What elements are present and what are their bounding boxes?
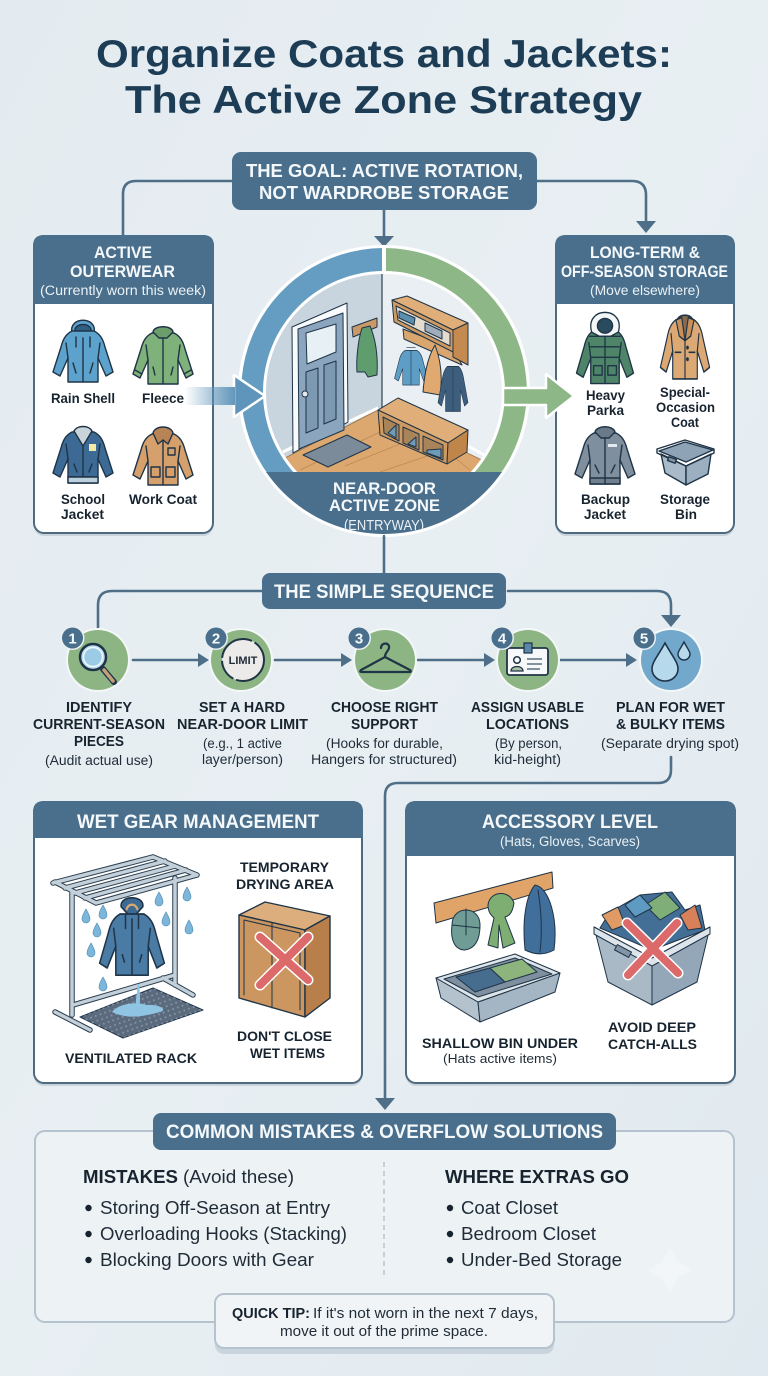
icon: school jacket xyxy=(53,426,113,483)
icon: hanger xyxy=(360,644,411,672)
label: school jacket: Jacket xyxy=(61,506,104,522)
connector: sequence to lower panels xyxy=(375,757,671,1110)
panel: wet gear management xyxy=(33,801,363,1086)
number badge: 2 xyxy=(212,630,220,648)
step text: (Separate drying spot) xyxy=(601,736,739,751)
step text xyxy=(311,699,457,767)
step text: (e.g., 1 active xyxy=(203,736,282,751)
step text: SUPPORT xyxy=(351,716,418,733)
label: special-occasion coat xyxy=(656,384,715,430)
floor xyxy=(286,410,481,472)
heading: active outerwear: ACTIVE xyxy=(94,244,152,262)
step text xyxy=(177,699,308,767)
label: school jacket: School xyxy=(61,491,105,507)
ring: green half xyxy=(386,248,527,491)
step text xyxy=(601,699,739,751)
callout: quick tip xyxy=(215,1294,554,1354)
icon: limit sign: LIMIT xyxy=(229,655,258,667)
icon: special-occasion coat xyxy=(660,315,710,379)
active zone circle xyxy=(238,245,530,542)
step text: CHOOSE RIGHT xyxy=(331,699,438,716)
drainage mat xyxy=(80,984,203,1038)
label: heavy parka xyxy=(586,387,625,418)
label: avoid deep catch-alls: CATCH-ALLS xyxy=(608,1036,697,1052)
label: shallow bin under: SHALLOW BIN UNDER xyxy=(422,1035,578,1051)
label: don't close wet items: DON'T CLOSE xyxy=(237,1028,332,1044)
icon: magnifier xyxy=(80,644,114,682)
label: heavy parka: Parka xyxy=(587,402,624,418)
label: storage bin xyxy=(660,491,710,522)
list: mistakes: Overloading Hooks (Stacking) xyxy=(100,1223,347,1244)
goal banner: THE GOAL: ACTIVE ROTATION, xyxy=(246,160,523,181)
bench xyxy=(378,398,468,464)
list: where extras go: Under-Bed Storage xyxy=(461,1249,622,1270)
number badge: 1 xyxy=(68,630,77,648)
label: shallow bin under: (Hats active items) xyxy=(443,1051,557,1066)
step text xyxy=(33,699,165,768)
label: fleece: Fleece xyxy=(142,390,184,406)
heading: long-term storage xyxy=(561,244,728,298)
panel: long-term storage xyxy=(555,235,735,536)
number badge: 3 xyxy=(355,630,363,648)
label: don't close wet items xyxy=(237,1028,332,1061)
water drops xyxy=(82,887,193,991)
heading: active outerwear: (Currently worn this week) xyxy=(40,283,206,298)
step text: PLAN FOR WET xyxy=(616,699,725,716)
icon: deep bin with red cross xyxy=(594,892,710,1005)
connector: sequence left branch xyxy=(98,591,268,628)
list: mistakes: Storing Off-Season at Entry xyxy=(100,1197,331,1218)
label: backup jacket: Jacket xyxy=(584,506,626,522)
number badge xyxy=(60,626,84,650)
heading: active outerwear xyxy=(40,244,206,298)
hanging coats xyxy=(394,345,468,411)
label: avoid deep catch-alls xyxy=(608,1019,697,1052)
step arrows xyxy=(133,653,637,667)
list: mistakes: Blocking Doors with Gear xyxy=(100,1249,314,1270)
label: special-occasion coat: Occasion xyxy=(656,399,715,415)
banner: near-door active zone: (ENTRYWAY) xyxy=(344,518,424,534)
wall shelf xyxy=(392,296,468,365)
label: avoid deep catch-alls: AVOID DEEP xyxy=(608,1019,696,1035)
banner: near-door active zone: ACTIVE ZONE xyxy=(329,497,440,515)
goal banner xyxy=(232,152,537,210)
label: ventilated rack: VENTILATED RACK xyxy=(65,1050,197,1066)
step text: (Hooks for durable, xyxy=(326,736,443,751)
icon: heavy parka xyxy=(576,312,634,384)
banner: near-door active zone xyxy=(266,472,502,534)
label: temporary drying area: DRYING AREA xyxy=(236,876,334,892)
label: special-occasion coat: Special- xyxy=(660,384,710,400)
list: where extras go: Bedroom Closet xyxy=(461,1223,596,1244)
banner: common mistakes: COMMON MISTAKES & OVERFLOW SOLUTIONS xyxy=(166,1122,603,1143)
banner: common mistakes xyxy=(153,1113,616,1150)
label: temporary drying area: TEMPORARY xyxy=(240,859,330,875)
icon: limit sign xyxy=(222,639,264,681)
step text: layer/person) xyxy=(202,752,283,767)
heading: long-term storage: LONG-TERM & xyxy=(590,244,700,262)
list: where extras go xyxy=(445,1167,629,1270)
callout: quick tip: QUICK TIP: xyxy=(232,1306,310,1322)
connector: goal to active zone xyxy=(374,210,394,247)
connector: zone to sequence xyxy=(383,536,385,574)
number badge xyxy=(204,626,228,650)
list: where extras go: Coat Closet xyxy=(461,1197,558,1218)
arrow: into active zone xyxy=(185,375,265,417)
icon: work coat xyxy=(133,427,193,485)
heading: long-term storage: OFF-SEASON STORAGE xyxy=(561,263,728,281)
list: mistakes: MISTAKES xyxy=(83,1167,178,1187)
step text: (Audit actual use) xyxy=(45,753,153,768)
icon: shallow bin xyxy=(436,954,560,1022)
step text: & BULKY ITEMS xyxy=(616,716,725,733)
banner: near-door active zone: NEAR-DOOR xyxy=(333,480,436,498)
panel: common mistakes and overflow xyxy=(35,1113,734,1354)
number badge: 5 xyxy=(640,630,648,648)
heading: accessory level xyxy=(482,812,658,849)
step 2: limit xyxy=(177,626,308,767)
title: Organize Coats and Jackets: xyxy=(96,33,672,76)
label: backup jacket xyxy=(581,491,630,522)
list: where extras go: WHERE EXTRAS GO xyxy=(445,1167,629,1187)
hook rack with green coat xyxy=(352,318,377,377)
step text: kid-height) xyxy=(494,752,561,767)
panel: accessory level xyxy=(405,801,736,1086)
heading: long-term storage: (Move elsewhere) xyxy=(590,283,700,298)
arrow: out to long-term storage xyxy=(503,374,574,418)
label: backup jacket: Backup xyxy=(581,491,630,507)
label: special-occasion coat: Coat xyxy=(671,414,699,430)
number badge: 4 xyxy=(498,630,507,648)
icon: fleece xyxy=(133,327,193,384)
step text: SET A HARD xyxy=(199,699,285,716)
heading: wet gear management: WET GEAR MANAGEMENT xyxy=(77,812,319,833)
illustration: wall rail with hat, scarf and coat xyxy=(434,872,555,954)
label: storage bin: Bin xyxy=(675,506,697,522)
callout: quick tip: move it out of the prime space. xyxy=(280,1324,488,1340)
illustration: entryway xyxy=(260,270,507,480)
panel: active outerwear xyxy=(33,235,214,536)
step text: PIECES xyxy=(74,733,124,750)
step 3: hanger xyxy=(311,626,457,767)
step text: LOCATIONS xyxy=(486,716,569,733)
illustration: ventilated rack xyxy=(53,857,203,1038)
step text xyxy=(471,699,584,767)
heading: the simple sequence: THE SIMPLE SEQUENCE xyxy=(274,582,494,603)
number badge xyxy=(347,626,371,650)
step 4: locations xyxy=(471,626,584,767)
step 5: wet items xyxy=(601,626,739,751)
step text: NEAR-DOOR LIMIT xyxy=(177,716,308,733)
title xyxy=(96,33,672,122)
icon: storage bin xyxy=(657,440,714,485)
label: heavy parka: Heavy xyxy=(586,387,625,403)
icon: closed cabinet with red cross xyxy=(239,902,330,1017)
step text: Hangers for structured) xyxy=(311,752,457,767)
connector: goal to off-season storage xyxy=(537,181,656,233)
step 1: identify xyxy=(33,626,165,768)
heading: accessory level: ACCESSORY LEVEL xyxy=(482,812,658,833)
icon: water drops xyxy=(652,642,690,681)
label: don't close wet items: WET ITEMS xyxy=(250,1045,325,1061)
step text: ASSIGN USABLE xyxy=(471,699,584,716)
label: temporary drying area xyxy=(236,859,334,892)
label: work coat: Work Coat xyxy=(129,491,197,507)
list: mistakes: (Avoid these) xyxy=(183,1167,294,1187)
step text: CURRENT-SEASON xyxy=(33,716,165,733)
icon: rain shell xyxy=(53,320,113,382)
title: The Active Zone Strategy xyxy=(125,79,642,122)
callout: quick tip: If it's not worn in the next 7 days, xyxy=(313,1306,538,1322)
label: storage bin: Storage xyxy=(660,491,710,507)
icon: backup jacket xyxy=(575,427,635,484)
number badge xyxy=(490,626,514,650)
connector: goal to active outerwear xyxy=(123,181,232,236)
list: mistakes xyxy=(83,1167,347,1270)
label: school jacket xyxy=(61,491,105,522)
step text: (By person, xyxy=(495,736,562,751)
rack frame xyxy=(53,857,197,1030)
heading: accessory level: (Hats, Gloves, Scarves) xyxy=(500,834,640,849)
step text: IDENTIFY xyxy=(66,699,132,716)
wet jacket xyxy=(100,898,164,975)
heading: active outerwear: OUTERWEAR xyxy=(70,263,175,281)
label: rain shell: Rain Shell xyxy=(51,390,115,406)
door mat xyxy=(303,435,371,467)
goal banner: NOT WARDROBE STORAGE xyxy=(259,182,509,203)
connector: sequence right branch xyxy=(508,591,681,627)
door xyxy=(292,303,348,453)
heading: the simple sequence xyxy=(262,573,506,609)
ring: blue half xyxy=(241,248,382,491)
label: shallow bin under xyxy=(422,1035,578,1066)
icon: name badge xyxy=(507,643,548,675)
